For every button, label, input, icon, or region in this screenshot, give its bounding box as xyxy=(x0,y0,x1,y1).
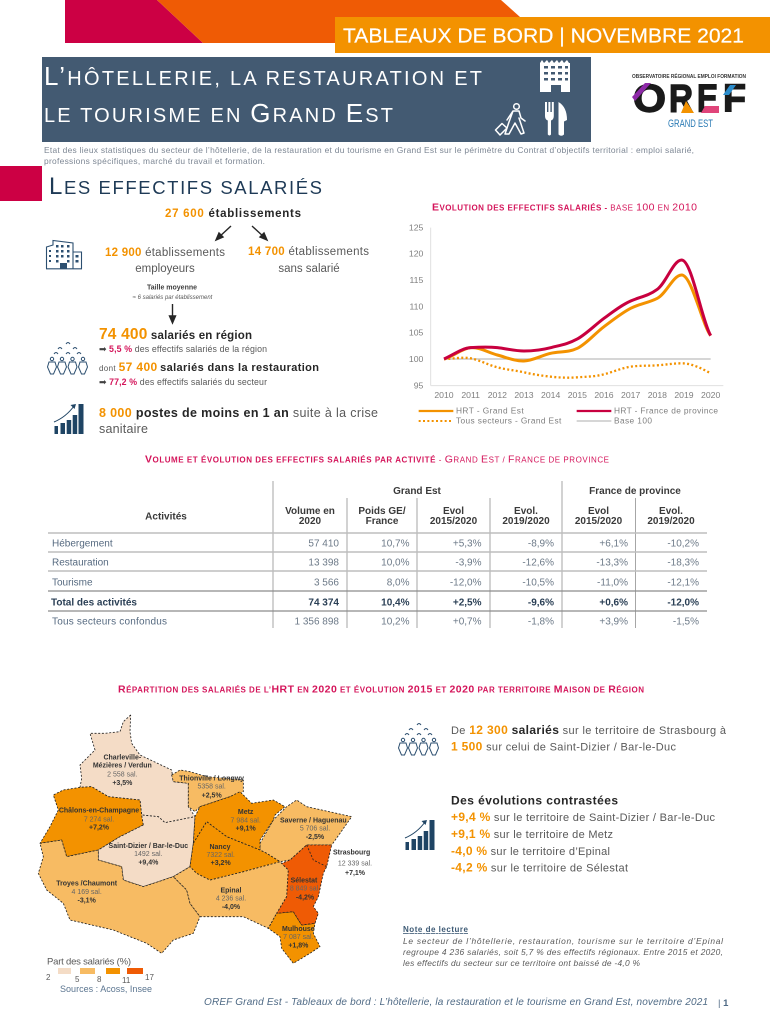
row: restauration: -12,6% xyxy=(522,558,554,568)
employers xyxy=(105,247,225,275)
reading note: regroupe 4 236 salariés, soit 5,7 % des effectifs régionaux. Entre 2015 et 2020, xyxy=(403,947,723,957)
map legend: 5 xyxy=(75,975,80,984)
row: all sectors: +3,9% xyxy=(599,616,628,628)
map labels: 7 984 sal. xyxy=(231,817,261,824)
header shapes xyxy=(65,0,520,43)
arrow down xyxy=(170,304,176,323)
map labels: Mulhouse xyxy=(282,926,315,933)
map labels: -2,5% xyxy=(306,834,325,841)
map labels: +3,5% xyxy=(112,780,133,787)
map labels: Thionville / Longwy xyxy=(179,775,244,782)
map labels: Troyes /Chaumont xyxy=(56,880,118,887)
row: tourisme xyxy=(52,578,699,588)
logo: OREF Grand Est: GRAND EST xyxy=(668,118,713,130)
title: LE TOURISME EN GRAND EST xyxy=(44,98,393,128)
employers: employeurs xyxy=(135,263,195,275)
footer: OREF Grand Est - Tableaux de bord : L’hôtellerie, la restauration et le tourisme en Grand Est, novembre 2021 xyxy=(204,997,708,1008)
banner: tableaux de bord: TABLEAUX DE BORD | NOVEMBRE 2021 xyxy=(343,26,744,48)
map labels: 12 339 sal. xyxy=(338,860,372,867)
map labels: Saint-Dizier / Bar-le-Duc xyxy=(109,843,188,850)
list: +9,4 % sur le territoire de Saint-Dizier / Bar-le-Duc xyxy=(451,810,716,824)
list: -4,0 % sur le territoire d’Epinal xyxy=(451,844,610,858)
legend: Base 100 xyxy=(614,416,652,426)
legend: Tous secteurs - Grand Est xyxy=(456,416,562,426)
map labels: +1,8% xyxy=(288,942,309,949)
table header: 2015/2020 xyxy=(430,516,478,527)
row: total: +2,5% xyxy=(453,598,482,608)
map labels: Saverne / Haguenau xyxy=(280,818,347,825)
icon: office building xyxy=(46,240,82,269)
series: all sectors xyxy=(444,358,711,378)
panel: key figures xyxy=(46,208,378,436)
row: tourisme: 3 566 xyxy=(314,578,339,588)
icon: growth chart xyxy=(405,820,434,850)
legend: HRT - France de province xyxy=(614,406,718,416)
map legend: 11 xyxy=(122,976,131,985)
y axis xyxy=(409,223,424,390)
footer: | 1 xyxy=(718,998,729,1009)
map labels: 4 236 sal. xyxy=(216,896,246,903)
map labels xyxy=(56,754,372,949)
map labels: -4,2% xyxy=(296,895,315,902)
table header: Evol. xyxy=(659,506,683,517)
map labels: Sélestat xyxy=(291,877,318,884)
title panel xyxy=(42,57,591,142)
intro text: professions spécifiques, marché du travail et formation. xyxy=(44,156,265,166)
job losses: 8 000 postes de moins en 1 an suite à la crise xyxy=(99,406,378,420)
row: tourisme: -12,0% xyxy=(450,578,482,588)
legend: HRT - Grand Est xyxy=(456,406,524,416)
list: +9,1 % sur le territoire de Metz xyxy=(451,827,613,841)
reading note: Le secteur de l’hôtellerie, restauration, tourisme sur le territoire d’Epinal xyxy=(403,936,724,946)
table header: 2020 xyxy=(299,516,322,527)
line chart: evolution xyxy=(409,202,723,426)
row: restauration: -13,3% xyxy=(596,558,628,568)
row: restauration: -3,9% xyxy=(455,558,482,568)
map labels: 7322 sal. xyxy=(206,852,235,859)
heading: Des évolutions contrastées xyxy=(451,794,618,808)
y axis: 95 xyxy=(414,380,424,390)
table header: 2019/2020 xyxy=(502,516,550,527)
job losses: sanitaire xyxy=(99,422,148,436)
row: hébergement: 10,7% xyxy=(381,538,410,550)
map labels: +3,2% xyxy=(211,860,231,867)
row: all sectors: Tous secteurs confondus xyxy=(52,616,167,628)
legend xyxy=(419,406,718,426)
logo: OREF Grand Est: O xyxy=(633,78,666,120)
icon: fork and knife xyxy=(545,102,567,136)
map labels: +2,5% xyxy=(202,792,222,799)
map labels: Metz xyxy=(238,809,254,816)
list: -4,2 % sur le territoire de Sélestat xyxy=(451,860,628,874)
x axis: 2013 xyxy=(514,390,534,400)
employers: 12 900 établissements xyxy=(105,247,225,259)
territory: Sélestat xyxy=(277,845,332,925)
x axis: 2015 xyxy=(568,390,587,400)
row: all sectors xyxy=(52,616,699,628)
table header: France de province xyxy=(589,486,681,497)
logo: OREF Grand Est xyxy=(632,72,746,130)
map labels: 5358 sal. xyxy=(197,783,226,790)
map labels: 5 706 sal. xyxy=(300,826,330,833)
row: tourisme: -12,1% xyxy=(667,578,699,588)
row: tourisme: -10,5% xyxy=(522,578,554,588)
icon: hotel xyxy=(540,60,570,92)
row: all sectors: +0,7% xyxy=(453,616,482,628)
row: total: Total des activités xyxy=(51,598,137,608)
territory: Charleville xyxy=(80,715,195,823)
logo: OREF Grand Est: OBSERVATOIRE RÉGIONAL EMPLOI FORMATION xyxy=(632,72,746,80)
territory: Metz xyxy=(193,792,285,850)
map labels: 7 087 sal. xyxy=(283,934,314,941)
banner: tableaux de bord xyxy=(335,17,770,53)
no employees: sans salarié xyxy=(278,263,340,275)
icon: growth chart xyxy=(54,404,84,434)
row: total: 10,4% xyxy=(381,598,410,608)
territory: Troyes xyxy=(38,840,200,953)
map labels: +9,1% xyxy=(236,826,256,833)
row: hébergement: -8,9% xyxy=(528,538,554,550)
row: total xyxy=(51,598,699,608)
x axis: 2019 xyxy=(674,390,694,400)
restaurant employees: dont 57 400 salariés dans la restauration xyxy=(99,360,319,374)
map labels: 4 169 sal. xyxy=(72,889,102,896)
table header: 2015/2020 xyxy=(575,516,623,527)
territory: Epinal xyxy=(173,862,288,928)
row: total: -12,0% xyxy=(667,598,699,608)
row: hébergement: Hébergement xyxy=(52,538,113,550)
row: all sectors: -1,5% xyxy=(673,616,699,628)
average size xyxy=(133,284,213,301)
map legend: 2 xyxy=(46,973,51,982)
territory: Saverne xyxy=(260,800,352,862)
y axis: 115 xyxy=(410,275,424,285)
map labels: +7,2% xyxy=(89,825,110,832)
map labels: +7,1% xyxy=(345,870,366,877)
list xyxy=(451,810,716,874)
territory: Saint-Dizier xyxy=(98,815,195,887)
text xyxy=(451,723,727,754)
x axis: 2017 xyxy=(621,390,640,400)
table header: Evol xyxy=(588,506,609,517)
table header: 2019/2020 xyxy=(647,516,695,527)
map legend: 8 xyxy=(97,975,102,984)
y axis: 105 xyxy=(409,328,424,338)
section marker xyxy=(0,166,42,201)
intro text: Etat des lieux statistiques du secteur de l’hôtellerie, de la restauration et du tourisme en Grand Est sur le périmètre du Contrat d’objectifs territorial : emploi salarié, xyxy=(44,145,694,155)
table title: VOLUME ET ÉVOLUTION DES EFFECTIFS SALARIÉS PAR ACTIVITÉ - GRAND EST / FRANCE DE PROVINCE xyxy=(145,454,609,466)
section heading: LES EFFECTIFS SALARIÉS xyxy=(49,173,322,200)
employees in region: 74 400 salariés en région xyxy=(99,326,252,343)
table header xyxy=(145,486,695,527)
map labels: 2 558 sal. xyxy=(107,771,138,778)
y axis: 125 xyxy=(409,223,424,233)
x axis: 2018 xyxy=(648,390,667,400)
map labels: Epinal xyxy=(221,888,242,895)
map labels: +9,4% xyxy=(138,859,159,866)
map labels: 1492 sal. xyxy=(134,851,163,858)
row: total: 74 374 xyxy=(308,598,339,608)
map legend xyxy=(46,956,154,985)
y axis: 100 xyxy=(409,354,424,364)
row: tourisme: 8,0% xyxy=(387,578,410,588)
chart title: EVOLUTION DES EFFECTIFS SALARIÉS - BASE 100 EN 2010 xyxy=(432,202,697,214)
series: HRT Grand Est xyxy=(444,275,711,361)
row: all sectors: 10,2% xyxy=(381,616,410,628)
map labels: Mézières / Verdun xyxy=(93,763,152,770)
table header: Volume en xyxy=(285,506,335,517)
x axis: 2010 xyxy=(434,390,454,400)
icon: traveller xyxy=(496,104,525,135)
map labels: Nancy xyxy=(210,844,231,851)
table header: France xyxy=(366,516,399,527)
row: restauration: Restauration xyxy=(52,558,109,568)
icon: people xyxy=(398,724,438,755)
map labels: Charleville- xyxy=(104,754,142,761)
average size: ≈ 6 salariés par établissement xyxy=(133,295,213,301)
reading note: les effectifs du secteur sur ce territoire ont baissé de -4,0 % xyxy=(403,958,641,968)
establishments total: 27 600 établissements xyxy=(165,208,301,220)
territory: Thionville xyxy=(172,770,243,812)
row: hébergement: +5,3% xyxy=(453,538,482,550)
row: total: +0,6% xyxy=(599,598,628,608)
row: tourisme: -11,0% xyxy=(597,578,628,588)
callout: contrasted evolutions xyxy=(405,794,716,874)
table header: Activités xyxy=(145,512,187,522)
row: hébergement: -10,2% xyxy=(667,538,699,550)
table header: Evol. xyxy=(514,506,538,517)
map labels: -4,0% xyxy=(222,904,241,911)
x axis: 2014 xyxy=(541,390,560,400)
icon: people xyxy=(48,342,88,374)
row: tourisme: Tourisme xyxy=(52,578,93,588)
map: territories xyxy=(38,715,372,963)
text: 1 500 sur celui de Saint-Dizier / Bar-le-Duc xyxy=(451,740,676,754)
map labels: Châlons-en-Champagne xyxy=(59,808,139,815)
no employees: 14 700 établissements xyxy=(248,246,369,258)
map labels: -3,1% xyxy=(78,898,97,905)
row: restauration xyxy=(52,558,699,568)
row: all sectors: -1,8% xyxy=(528,616,554,628)
table: activities xyxy=(48,481,707,628)
map title: RÉPARTITION DES SALARIÉS DE L’HRT EN 2020 ET ÉVOLUTION 2015 ET 2020 PAR TERRITOIRE MAISON DE RÉGION xyxy=(118,684,644,696)
share of regional employees: ➡ 5,5 % des effectifs salariés de la région xyxy=(99,344,267,354)
map legend: Part des salariés (%) xyxy=(47,956,131,968)
y axis: 120 xyxy=(409,249,424,259)
territory: Châlons xyxy=(40,787,143,857)
row: restauration: 10,0% xyxy=(381,558,410,568)
arrows from total xyxy=(216,226,267,240)
intro text xyxy=(44,145,694,166)
row: hébergement: +6,1% xyxy=(599,538,628,550)
share of sector: ➡ 77,2 % des effectifs salariés du secteur xyxy=(99,377,267,387)
series: HRT France xyxy=(444,260,711,359)
y axis: 110 xyxy=(410,301,424,311)
sources: Sources : Acoss, Insee xyxy=(60,984,152,994)
map labels: 8 849 sal. xyxy=(290,886,320,893)
average size: Taille moyenne xyxy=(147,284,197,292)
reading note: Note de lecture xyxy=(403,925,469,934)
row: total: -9,6% xyxy=(528,598,554,608)
reading note xyxy=(403,925,724,968)
table header: Grand Est xyxy=(393,486,442,497)
x axis: 2012 xyxy=(488,390,507,400)
x axis: 2016 xyxy=(594,390,614,400)
job losses xyxy=(99,406,378,436)
x axis: 2011 xyxy=(461,390,480,400)
territory: Nancy xyxy=(190,822,280,880)
table header: Evol xyxy=(443,506,464,517)
row: restauration: -18,3% xyxy=(667,558,699,568)
map labels: 7 274 sal. xyxy=(84,816,114,823)
map labels: Strasbourg xyxy=(333,849,370,856)
x axis xyxy=(434,390,720,400)
no employees xyxy=(248,246,369,275)
logo: OREF Grand Est: F xyxy=(723,78,746,120)
title xyxy=(44,61,482,128)
x axis: 2020 xyxy=(701,390,720,400)
territory: Mulhouse xyxy=(268,912,320,963)
row: hébergement: 57 410 xyxy=(308,538,339,550)
logo: OREF Grand Est: E xyxy=(697,78,718,120)
callout: staff distribution xyxy=(398,723,727,755)
row: all sectors: 1 356 898 xyxy=(294,616,339,628)
table header: Poids GE/ xyxy=(358,506,406,517)
logo: OREF Grand Est: R xyxy=(669,78,693,120)
map legend: 17 xyxy=(145,973,154,982)
row: restauration: 13 398 xyxy=(308,558,339,568)
title: L’HÔTELLERIE, LA RESTAURATION ET xyxy=(44,61,482,91)
row: hébergement xyxy=(52,538,699,550)
text: De 12 300 salariés sur le territoire de Strasbourg à xyxy=(451,723,727,737)
